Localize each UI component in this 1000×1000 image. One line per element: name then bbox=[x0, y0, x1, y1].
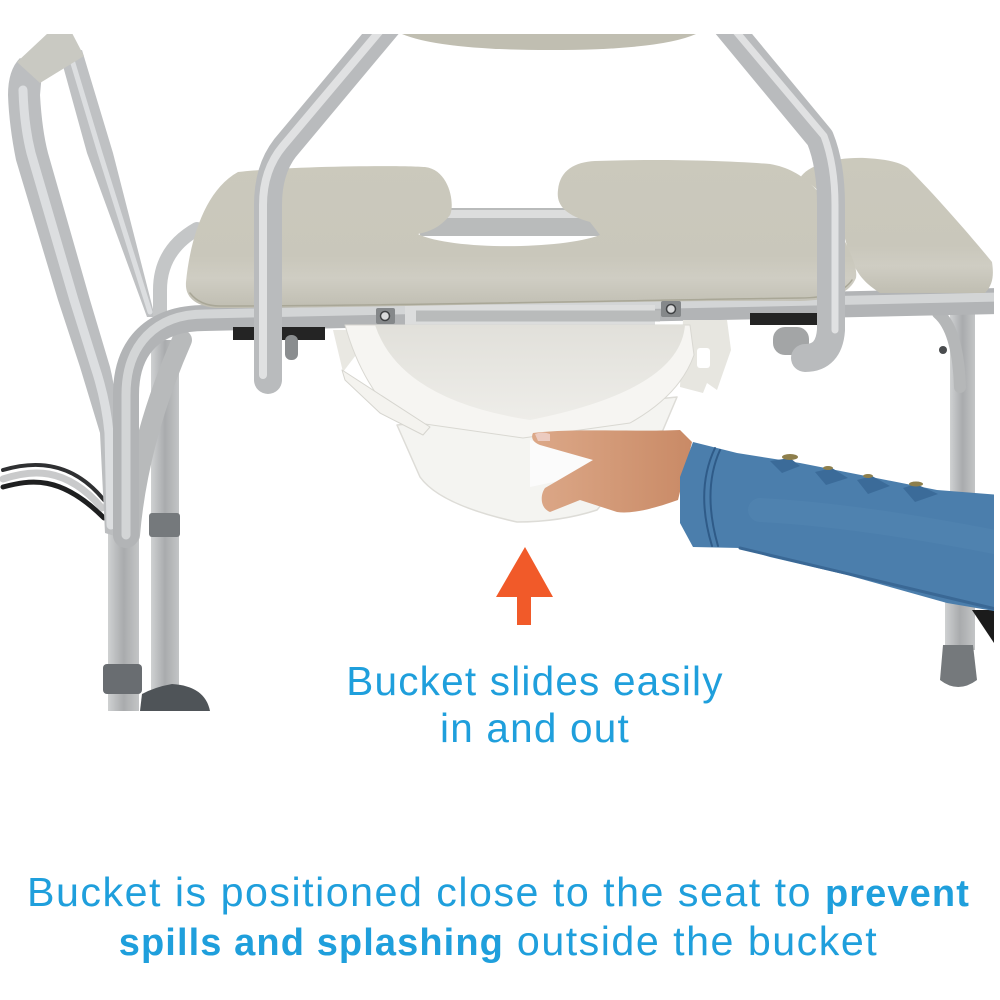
icon: orange up arrow bbox=[496, 547, 553, 625]
caption: bucket position: Bucket is positioned close to the seat to prevent bbox=[27, 869, 970, 915]
chair front arms and roller bbox=[263, 20, 835, 380]
chair left armrest bbox=[8, 33, 197, 537]
caption: bucket slides bbox=[346, 658, 724, 751]
caption: bucket slides: Bucket slides easily bbox=[346, 658, 724, 704]
bolts on rail bbox=[376, 301, 681, 324]
caption: bucket position: spills and splashing outside the bucket bbox=[119, 918, 878, 964]
hand holding bucket bbox=[532, 430, 692, 512]
chair back legs bbox=[103, 312, 994, 711]
caption: bucket position bbox=[27, 869, 970, 964]
chair frame rails bbox=[126, 297, 1000, 535]
denim sleeve bbox=[680, 442, 1000, 612]
bucket bbox=[333, 320, 731, 522]
caption: bucket slides: in and out bbox=[440, 705, 630, 751]
icon: hose at left bbox=[3, 465, 104, 518]
seat cushion bbox=[186, 34, 993, 308]
sleeve ruffles bbox=[770, 458, 938, 502]
photo: commode chair with bucket and arm bbox=[0, 34, 994, 711]
sleeve buttons bbox=[782, 454, 923, 486]
